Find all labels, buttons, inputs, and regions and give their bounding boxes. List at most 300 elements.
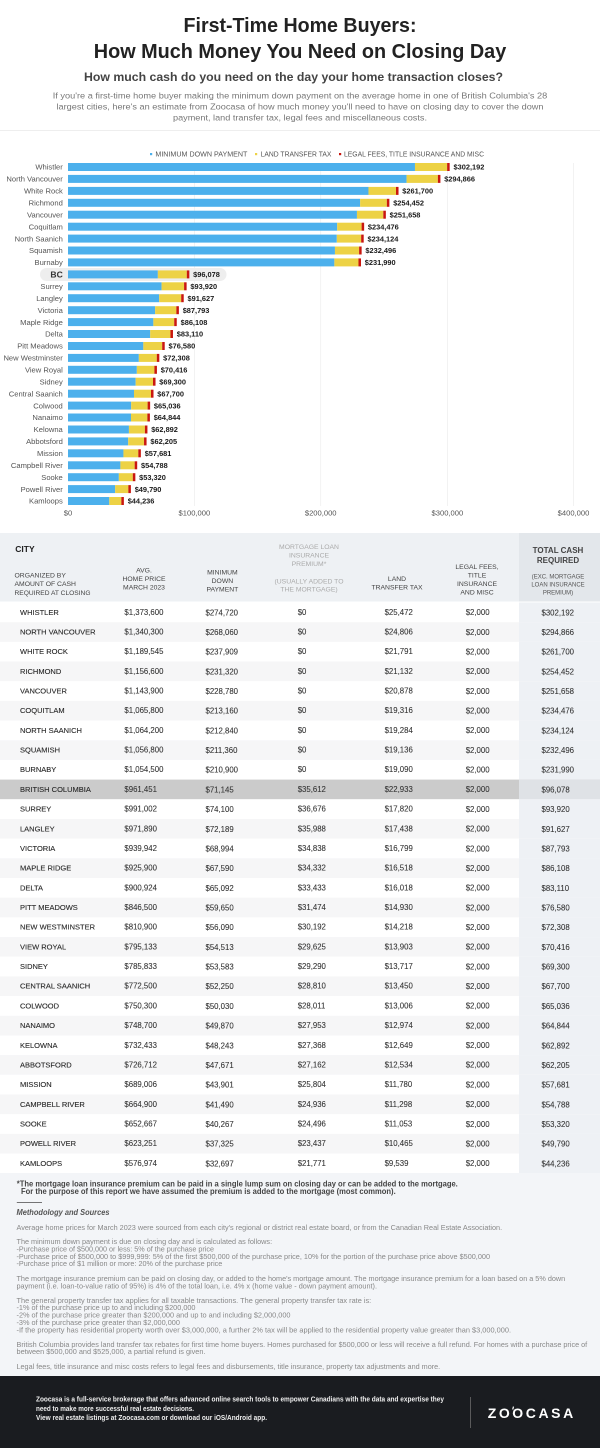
bar: Delta [45, 330, 203, 339]
row: Burnaby: $1,054,500 [124, 765, 164, 774]
bar: Maple Ridge: $86,108 [181, 318, 207, 327]
row: Vancouver: $0 [298, 687, 307, 696]
x axis labels [64, 508, 589, 518]
row: Kamloops: $576,974 [124, 1159, 158, 1168]
row: Vancouver: $20,878 [385, 687, 413, 696]
header: total cash required: LOAN INSURANCE [531, 582, 585, 588]
row: Nanaimo: $64,844 [542, 1022, 570, 1031]
bar: View Royal: $70,416 [161, 365, 187, 374]
row: Richmond [0, 662, 600, 681]
bar: View Royal: View Royal [25, 365, 63, 374]
header: land transfer tax: LAND [388, 576, 406, 583]
row: Pitt Meadows: $59,650 [206, 904, 234, 913]
row: New Westminster: $2,000 [466, 923, 490, 932]
methodology heading: Methodology and Sources [16, 1208, 110, 1217]
row: New Westminster [0, 917, 600, 937]
row: Delta: $33,433 [298, 883, 326, 892]
methodology text: -1% of the purchase price up to and including $200,000 [16, 1303, 196, 1312]
row: Kelowna: $12,649 [385, 1041, 413, 1050]
row: Sooke: $652,667 [124, 1119, 157, 1128]
row: Langley: $971,890 [124, 824, 158, 833]
bar: Burnaby: Burnaby [35, 258, 63, 267]
bar: Mission: Mission [37, 449, 63, 458]
row: Campbell River [0, 1094, 600, 1114]
x axis labels: $100,000 [179, 508, 210, 518]
row: Burnaby [0, 760, 600, 780]
x axis labels: $300,000 [432, 508, 463, 518]
row: New Westminster: $30,192 [298, 923, 326, 932]
row: Kamloops: $44,236 [542, 1159, 570, 1168]
row: Sooke: $2,000 [466, 1120, 490, 1129]
row: Maple Ridge: $16,518 [385, 864, 413, 873]
row: Colwood: $13,006 [385, 1001, 413, 1010]
legend: LAND TRANSFER TAX [261, 152, 332, 158]
row: White Rock: WHITE ROCK [20, 647, 68, 656]
bar: Pitt Meadows: $76,580 [168, 342, 195, 351]
row: White Rock: $21,791 [385, 647, 413, 656]
header: minimum down payment [206, 570, 238, 594]
row: Squamish: $2,000 [466, 746, 490, 755]
bar: Powell River [21, 485, 161, 494]
row: Powell River: $23,437 [298, 1139, 326, 1148]
row: Central Saanich: $772,500 [124, 982, 158, 991]
row: Victoria: $2,000 [466, 844, 490, 853]
row: Powell River: $623,251 [124, 1139, 157, 1148]
row: Sidney: $785,833 [124, 962, 157, 971]
row: Burnaby: $19,090 [385, 765, 413, 774]
bar: New Westminster: New Westminster [3, 354, 63, 363]
bar: Kamloops: Kamloops [29, 497, 63, 506]
row: Whistler: $274,720 [206, 608, 239, 617]
header: total cash required: PREMIUM) [543, 590, 573, 596]
row: Sidney [0, 957, 600, 976]
header: total cash required [531, 546, 585, 596]
row: North Vancouver [0, 622, 600, 642]
row: Sidney: $69,300 [542, 963, 570, 972]
row: New Westminster: NEW WESTMINSTER [20, 923, 96, 932]
row: North Vancouver: NORTH VANCOUVER [20, 628, 96, 637]
row: Nanaimo: $27,953 [298, 1021, 326, 1030]
row: Victoria [0, 839, 600, 858]
bar: Richmond [29, 198, 424, 208]
bar: Whistler: Whistler [35, 163, 63, 172]
row: Pitt Meadows: $2,000 [466, 903, 490, 912]
bar: Sidney [40, 377, 186, 386]
bar: Nanaimo: $64,844 [154, 413, 181, 422]
row: New Westminster: $56,090 [206, 923, 234, 932]
bar: BC [50, 269, 220, 279]
methodology text: The mortgage insurance premium can be paid on closing day, or added to the home's mortgage amount. The mortgage insurance premium for a loan based on a 5% down [16, 1274, 565, 1283]
header: city: ORGANIZED BY [14, 572, 66, 580]
row: Powell River: $2,000 [466, 1140, 490, 1149]
row: Nanaimo [0, 1016, 600, 1036]
methodology text: The minimum down payment is due on closing day and is calculated as follows: [16, 1237, 272, 1246]
row: Campbell River: CAMPBELL RIVER [20, 1100, 85, 1109]
methodology text: payment (i.e. loan-to-value ratio of 95%) is 4% of the total loan, i.e. 4% x (home value - down payment amount). [16, 1282, 377, 1290]
row: Langley: LANGLEY [20, 824, 55, 833]
title [94, 14, 507, 63]
row: British Columbia: $96,078 [542, 785, 570, 794]
x axis labels: $0 [64, 508, 72, 518]
bar: Powell River: Powell River [21, 485, 63, 494]
row: Sidney: $13,717 [385, 962, 413, 971]
footer text: Zoocasa is a full-service brokerage that offers advanced online search tools to empower Canadians with the data and expertise they [36, 1394, 445, 1404]
row: White Rock: $1,189,545 [124, 647, 164, 656]
row: Pitt Meadows: $31,474 [298, 903, 327, 912]
row: Campbell River: $664,900 [124, 1100, 158, 1109]
bar: Campbell River: $54,788 [141, 461, 168, 470]
bar: Surrey [40, 282, 217, 291]
bar: Powell River: $49,790 [135, 485, 161, 494]
intro text: If you're a first-time home buyer making the minimum down payment on the average home in one of British Columbia's 28 [53, 90, 547, 100]
row: White Rock: $0 [298, 647, 307, 656]
row: North Vancouver: $24,806 [385, 628, 413, 637]
bar: Richmond: Richmond [29, 199, 63, 208]
row: Richmond: $1,156,600 [124, 667, 164, 676]
row: Kelowna: $732,433 [124, 1041, 157, 1050]
bar: Surrey: Surrey [40, 282, 63, 291]
methodology text: -3% of the purchase price greater than $2,000,000 [16, 1318, 180, 1327]
row: Langley: $72,189 [206, 825, 234, 834]
row: British Columbia: $2,000 [466, 785, 490, 794]
methodology text: -2% of the purchase price greater than $200,000 and up to and including $2,000,000 [16, 1310, 290, 1320]
bar: White Rock: $261,700 [402, 187, 433, 196]
bar: White Rock: White Rock [24, 187, 63, 196]
bar: Kelowna: $62,892 [151, 425, 178, 434]
row: Coquitlam: COQUITLAM [20, 706, 65, 715]
bar: Pitt Meadows [17, 342, 195, 351]
bar: Kelowna: Kelowna [34, 425, 64, 434]
row: Kamloops: $21,771 [298, 1159, 326, 1168]
row: New Westminster: $810,900 [124, 923, 158, 932]
row: Kamloops: KAMLOOPS [20, 1159, 62, 1168]
row: Campbell River: $2,000 [466, 1100, 490, 1109]
row: Surrey: $991,002 [124, 805, 157, 814]
bar: Colwood: $65,036 [154, 401, 181, 410]
subtitle: How much cash do you need on the day your home transaction closes? [84, 70, 503, 84]
row: Richmond: $231,320 [206, 667, 239, 676]
header: minimum down payment: MINIMUM [207, 570, 238, 576]
bar: Victoria [38, 306, 209, 315]
bar: North Saanich [15, 234, 399, 243]
row: Mission: $25,804 [298, 1080, 327, 1089]
row: Delta: $65,092 [206, 884, 234, 893]
methodology text: The general property transfer tax applies for all taxable transactions. The general property transfer tax rate is: [16, 1296, 371, 1305]
row: Mission: MISSION [20, 1080, 52, 1089]
row: Nanaimo: NANAIMO [20, 1021, 55, 1030]
row: Pitt Meadows: $846,500 [124, 903, 158, 912]
row: Abbotsford: $2,000 [466, 1061, 490, 1070]
methodology text: British Columbia provides land transfer tax rebates for first time home buyers. Homes purchased for $500,000 or less will receive a full refund. For homes with a purchase price of [16, 1340, 587, 1349]
methodology text: Legal fees, title insurance and misc costs refers to legal fees and disbursements, title insurance, property tax adjustments and more. [16, 1362, 440, 1371]
row: Pitt Meadows: $76,580 [542, 904, 570, 913]
row: Sooke: SOOKE [20, 1119, 47, 1128]
bar: Surrey: $93,920 [190, 282, 217, 291]
row: Maple Ridge [0, 858, 600, 878]
row: Mission: $57,681 [542, 1081, 570, 1090]
row: Richmond: $254,452 [542, 667, 574, 676]
row: Nanaimo: $49,870 [206, 1022, 234, 1031]
row: Squamish: SQUAMISH [20, 746, 60, 755]
row: Pitt Meadows: $14,930 [385, 903, 413, 912]
data table [0, 602, 600, 1173]
row: British Columbia [0, 780, 600, 799]
bar: Nanaimo [32, 413, 181, 422]
row: Campbell River: $11,298 [385, 1100, 412, 1109]
row: Vancouver: $228,780 [206, 687, 239, 696]
header: legal fees [455, 564, 499, 596]
row: Whistler: $25,472 [385, 608, 413, 617]
methodology text: -Purchase price of $1 million or more: 20% of the purchase price [16, 1259, 222, 1268]
header: average home price: HOME PRICE [122, 576, 166, 583]
row: Burnaby: $2,000 [466, 766, 490, 775]
row: Colwood: $2,000 [466, 1002, 490, 1011]
row: Delta: $16,018 [385, 883, 413, 892]
row: White Rock [0, 642, 600, 662]
header: minimum down payment: PAYMENT [206, 586, 238, 594]
footer text: need to make more successful real estate decisions. [36, 1404, 194, 1413]
row: Kelowna: $2,000 [466, 1041, 490, 1050]
row: Abbotsford: $62,205 [542, 1061, 570, 1070]
row: White Rock: $261,700 [542, 648, 575, 657]
row: Powell River: $37,325 [206, 1140, 234, 1149]
bar: North Saanich: North Saanich [15, 234, 63, 243]
header: land transfer tax [371, 576, 423, 592]
row: North Vancouver: $268,060 [206, 628, 239, 637]
bar: North Vancouver: $294,866 [444, 175, 475, 184]
methodology text: -Purchase price of $500,000 to $999,999: 5% of the first $500,000 of the purchase price, 10% for the portion of the purchase price above $500,000 [16, 1252, 490, 1261]
row: Sooke: $53,320 [542, 1120, 570, 1129]
row: Sooke [0, 1114, 600, 1134]
header: average home price: MARCH 2023 [123, 584, 165, 592]
row: New Westminster: $72,308 [542, 923, 570, 932]
row: Sidney: $29,290 [298, 962, 327, 971]
row: Sooke: $40,267 [206, 1120, 234, 1129]
bar: Victoria: Victoria [38, 306, 64, 315]
row: Coquitlam: $0 [298, 706, 307, 715]
row: Abbotsford: $27,162 [298, 1060, 326, 1069]
header: minimum down payment: DOWN [212, 578, 233, 585]
header: land transfer tax: TRANSFER TAX [371, 584, 423, 592]
bar: Sidney: Sidney [40, 377, 63, 386]
header: mortgage loan insurance premium: THE MORTGAGE) [280, 586, 338, 594]
row: Squamish: $19,136 [385, 746, 413, 755]
header: legal fees: AND MISC [460, 590, 494, 596]
row: View Royal: VIEW ROYAL [20, 942, 66, 951]
row: Squamish: $1,056,800 [124, 746, 164, 755]
row: Vancouver [0, 681, 600, 701]
row: Abbotsford: $47,671 [206, 1061, 234, 1070]
bar: Sooke [41, 473, 166, 482]
bar: Maple Ridge: Maple Ridge [20, 318, 63, 327]
methodology text [16, 1223, 587, 1371]
header: legal fees: INSURANCE [457, 581, 497, 588]
row: Mission [0, 1075, 600, 1094]
row: Kamloops: $9,539 [385, 1159, 408, 1168]
bar: White Rock [24, 187, 433, 196]
row: Surrey: $2,000 [466, 805, 490, 814]
row: Sooke: $24,496 [298, 1119, 326, 1128]
row: Abbotsford: $12,534 [385, 1060, 413, 1069]
row: Mission: $2,000 [466, 1080, 490, 1089]
row: View Royal: $54,513 [206, 943, 234, 952]
row: Langley [0, 819, 600, 839]
header: city: AMOUNT OF CASH [14, 581, 76, 588]
row: Victoria: $34,838 [298, 844, 326, 853]
header: city: REQUIRED AT CLOSING [14, 590, 90, 597]
bar: Central Saanich [9, 389, 184, 398]
row: Kamloops: $2,000 [466, 1159, 490, 1168]
row: Richmond: RICHMOND [20, 667, 62, 676]
bar: Pitt Meadows: Pitt Meadows [17, 342, 63, 351]
row: Nanaimo: $12,974 [385, 1021, 413, 1030]
row: Central Saanich: $13,450 [385, 982, 413, 991]
header: mortgage loan insurance premium: PREMIUM* [292, 561, 327, 568]
methodology text: between $500,000 and $525,000, a partial refund is given. [16, 1347, 206, 1356]
row: Kamloops: $32,697 [206, 1159, 234, 1168]
row: North Saanich: $0 [298, 726, 307, 735]
row: Coquitlam: $2,000 [466, 707, 490, 716]
row: Colwood: $750,300 [124, 1001, 158, 1010]
row: Abbotsford: $726,712 [124, 1060, 157, 1069]
row: Surrey: $36,676 [298, 805, 326, 814]
logo: Zoocasa: ZOOCASA [488, 1405, 573, 1421]
bar: Burnaby [35, 258, 396, 267]
row: View Royal: $29,625 [298, 942, 327, 951]
bar: Central Saanich: $67,700 [157, 389, 184, 398]
row: Central Saanich: $28,810 [298, 982, 327, 991]
footer [0, 1376, 600, 1448]
bar: Squamish: Squamish [29, 246, 63, 255]
row: North Saanich: $1,064,200 [124, 726, 164, 735]
bar: North Vancouver: North Vancouver [6, 175, 63, 184]
row: View Royal: $795,133 [124, 942, 157, 951]
legend: MINIMUM DOWN PAYMENT [155, 152, 248, 158]
bar: Abbotsford: Abbotsford [26, 437, 63, 446]
row: Coquitlam: $1,065,800 [124, 706, 164, 715]
row: Maple Ridge: $925,900 [124, 864, 158, 873]
row: Delta: $2,000 [466, 884, 490, 893]
legend [150, 152, 484, 158]
row: Squamish: $232,496 [542, 746, 574, 755]
row: Campbell River: $54,788 [542, 1100, 570, 1109]
row: Sidney: SIDNEY [20, 962, 48, 971]
row: Whistler: $302,192 [542, 608, 574, 617]
row: Kelowna: KELOWNA [20, 1041, 58, 1050]
legend: LEGAL FEES, TITLE INSURANCE AND MISC [344, 152, 484, 158]
row: North Saanich [0, 721, 600, 740]
bar: Burnaby: $231,990 [365, 258, 396, 267]
row: Squamish: $211,360 [206, 746, 238, 755]
header: mortgage loan insurance premium: INSURANCE [289, 552, 329, 560]
header: average home price [122, 568, 166, 592]
row: Central Saanich: CENTRAL SAANICH [20, 982, 90, 991]
row: Victoria: $87,793 [542, 845, 570, 854]
bar: Vancouver: Vancouver [27, 210, 63, 219]
bar: Campbell River [11, 461, 168, 470]
row: Maple Ridge: $34,332 [298, 864, 326, 873]
row: Coquitlam [0, 701, 600, 721]
row: Burnaby: $231,990 [542, 766, 575, 775]
bar: Vancouver [27, 210, 420, 219]
bar: Colwood: Colwood [33, 401, 63, 410]
row: Delta [0, 878, 600, 898]
row: Colwood [0, 996, 600, 1016]
x axis labels: $200,000 [305, 508, 337, 518]
header: legal fees: TITLE [468, 572, 487, 580]
row: Squamish: $0 [298, 746, 307, 755]
bar: North Saanich: $234,124 [368, 234, 399, 243]
row: Vancouver: $2,000 [466, 687, 490, 696]
BC highlight pill [40, 268, 226, 281]
bar: Delta: $83,110 [177, 330, 203, 339]
row: Langley: $35,988 [298, 824, 326, 833]
bar: Coquitlam: $234,476 [368, 222, 399, 231]
row: Whistler: $1,373,600 [124, 608, 164, 617]
row: Victoria: $16,799 [385, 844, 413, 853]
bar: Mission [37, 449, 171, 458]
row: Mission: $43,901 [206, 1081, 234, 1090]
row: View Royal [0, 937, 600, 957]
bar: Sooke: Sooke [41, 473, 63, 482]
bar: Victoria: $87,793 [183, 306, 209, 315]
footnote: For the purpose of this report we have assumed the premium is added to the mortgage (most common). [21, 1187, 396, 1196]
row: Whistler [0, 602, 600, 622]
row: Whistler: WHISTLER [20, 608, 59, 617]
footer text: View real estate listings at Zoocasa.com or download our iOS/Android app. [36, 1413, 267, 1422]
bar: Abbotsford [26, 437, 177, 446]
footer text [36, 1394, 445, 1422]
row: Kelowna: $62,892 [542, 1041, 570, 1050]
row: Richmond: $21,132 [385, 667, 413, 676]
row: Vancouver: $251,658 [542, 687, 574, 696]
row: Squamish [0, 740, 600, 760]
row: Whistler: $2,000 [466, 608, 490, 617]
bar: Sooke: $53,320 [139, 473, 166, 482]
header: total cash required: (EXC. MORTGAGE [532, 574, 584, 580]
bar: Abbotsford: $62,205 [150, 437, 177, 446]
row: Coquitlam: $213,160 [206, 707, 239, 716]
row: Richmond: $2,000 [466, 667, 490, 676]
row: Delta: DELTA [20, 883, 43, 892]
row: Whistler: $0 [298, 608, 307, 617]
row: Central Saanich [0, 976, 600, 996]
row: Surrey: $93,920 [542, 805, 570, 814]
bar: Coquitlam [29, 222, 399, 231]
bar: Kamloops: $44,236 [128, 497, 154, 506]
bar: Central Saanich: Central Saanich [9, 389, 63, 398]
row: Kamloops [0, 1154, 600, 1173]
row: Central Saanich: $2,000 [466, 982, 490, 991]
row: Surrey: SURREY [20, 805, 51, 814]
row: Central Saanich: $67,700 [542, 982, 570, 991]
row: British Columbia: $35,612 [298, 785, 326, 794]
row: New Westminster: $14,218 [385, 923, 413, 932]
bar: Maple Ridge [20, 318, 207, 327]
bar: Mission: $57,681 [145, 449, 171, 458]
header: mortgage loan insurance premium: (USUALLY ADDED TO [274, 578, 344, 586]
row: Burnaby: $0 [298, 765, 307, 774]
row: Victoria: $939,942 [124, 844, 157, 853]
row: North Vancouver: $1,340,300 [124, 628, 164, 637]
intro text [53, 90, 547, 122]
row: Pitt Meadows [0, 898, 600, 917]
row: North Saanich: $19,284 [385, 726, 413, 735]
row: White Rock: $2,000 [466, 648, 490, 657]
row: Burnaby: $210,900 [206, 766, 239, 775]
row: View Royal: $70,416 [542, 943, 570, 952]
row: Nanaimo: $748,700 [124, 1021, 158, 1030]
